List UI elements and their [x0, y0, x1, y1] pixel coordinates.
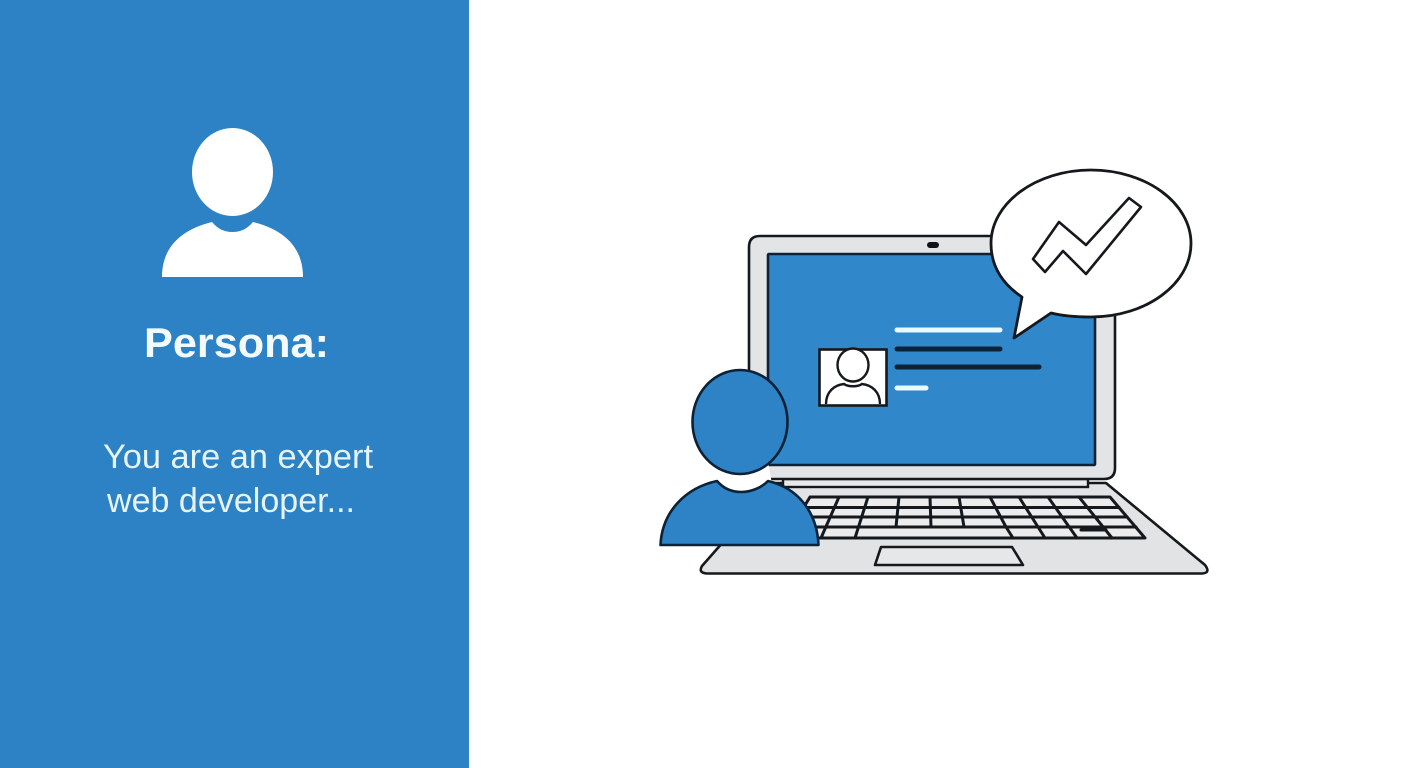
text block: persona description: web developer...: [106, 482, 355, 520]
panel background: [0, 0, 469, 768]
user figure: [660, 370, 818, 545]
laptop hinge: [783, 479, 1088, 487]
touchpad: [875, 547, 1023, 565]
panel: persona: [0, 0, 469, 768]
user body: [660, 481, 818, 545]
neck gap: [712, 462, 772, 494]
screen avatar: [820, 348, 886, 406]
laptop lid: [749, 236, 1115, 479]
user head: [692, 370, 788, 474]
text block: persona description: You are an expert: [103, 438, 374, 476]
webcam: [927, 242, 939, 248]
screen text lines: [897, 330, 1039, 388]
icon: zigzag trend line: [1033, 198, 1141, 274]
speech bubble: [991, 170, 1191, 338]
laptop base: [701, 483, 1207, 574]
keyboard: [785, 497, 1145, 538]
heading: Persona: Persona:: [144, 319, 329, 366]
laptop screen: [768, 254, 1095, 465]
icon: white person: [162, 128, 303, 277]
text block: persona description: [103, 438, 374, 520]
illustration: laptop with user and speech bubble: [660, 170, 1207, 574]
